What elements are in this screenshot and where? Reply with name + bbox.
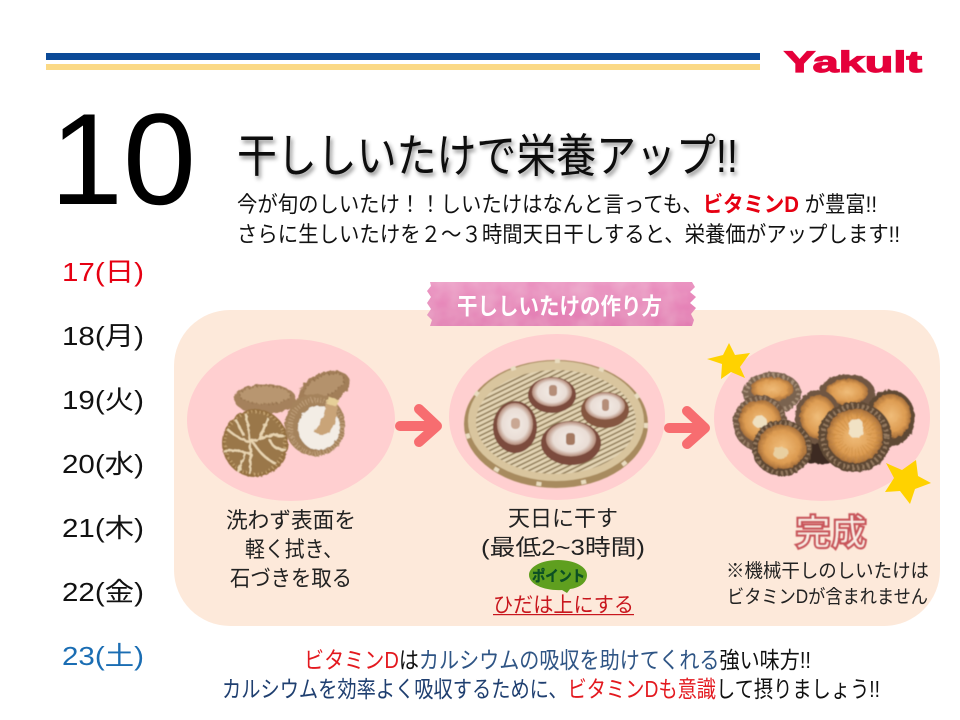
bottom message [222,647,880,702]
step 3 note [726,560,929,608]
panel: how to make [174,310,940,626]
icon: star bottom [885,460,931,504]
step 2 text: 天日に干す [508,506,618,531]
intro text: さらに生しいたけを２～３時間天日干しすると、栄養価がアップします!! [237,222,900,247]
month number: 10 [50,86,196,232]
date list: 17(日) [62,257,144,287]
header lines [46,53,760,70]
complete heading: 完成 [795,512,867,553]
step 1 circle [187,339,395,501]
intro text [237,192,900,247]
point text: ひだは上にする [493,594,634,617]
step 3 note: ビタミンDが含まれません [727,586,928,608]
arrow 2 [669,411,705,444]
date list: 22(金) [62,577,144,607]
date list: 23(土) [62,641,144,671]
step 2 text [481,506,645,560]
date list: 21(木) [62,513,144,543]
bottom message: ビタミンDはカルシウムの吸収を助けてくれる強い味方!! [304,647,811,673]
intro text: 今が旬のしいたけ！！しいたけはなんと言っても、ビタミンD が豊富!! [237,192,877,217]
banner [427,282,696,326]
step 1 text [226,508,356,591]
banner: 干ししいたけの作り方 [457,293,662,319]
step 2 text: (最低2~3時間) [481,535,645,560]
icon: point bubble: ポイント [532,568,585,585]
icon: mushrooms on basket [464,360,648,488]
date list: 18(月) [62,321,144,351]
step 3 circle [714,335,930,501]
icon: fresh shiitake [222,363,355,477]
bottom message: カルシウムを効率よく吸収するために、ビタミンDも意識して摂りましょう!! [222,676,880,702]
date list: 19(火) [62,385,144,415]
step 1 text: 洗わず表面を [226,508,356,533]
icon: dried shiitake [733,372,915,476]
icon: point bubble [529,560,587,593]
step 2 circle [449,334,665,500]
Yakult logo: Yakult [784,46,922,79]
step 1 text: 軽く拭き、 [245,537,343,562]
date list [62,257,144,671]
arrow 1 [400,409,437,442]
title: 干ししいたけで栄養アップ!! [237,130,738,182]
step 3 note: ※機械干しのしいたけは [726,560,929,582]
step 1 text: 石づきを取る [230,566,352,591]
date list: 20(水) [62,449,144,479]
icon: star top [707,343,750,379]
